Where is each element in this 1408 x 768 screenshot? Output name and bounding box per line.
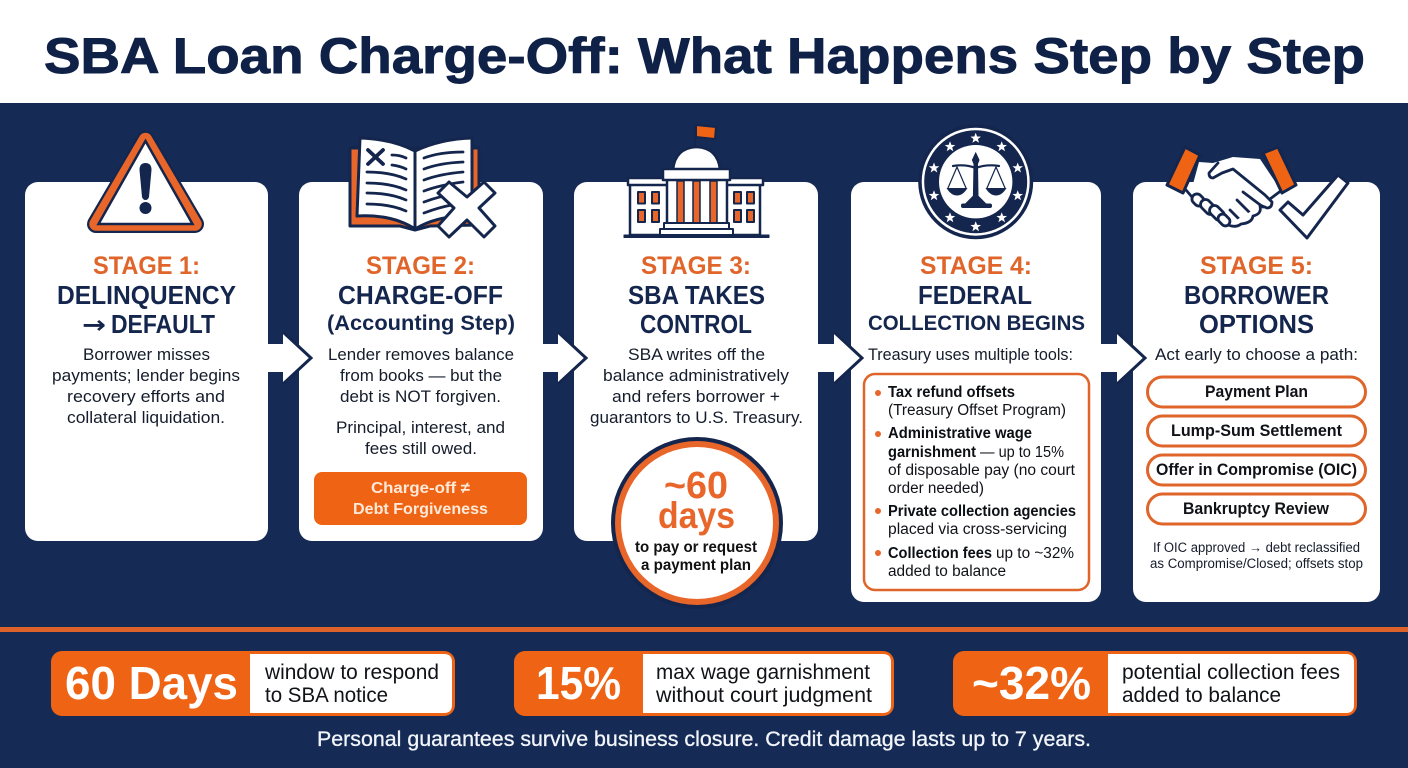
- option: offer in compromise: Offer in Compromise (OIC): [1156, 461, 1357, 479]
- text: stage 3 description: and refers borrower +: [612, 388, 780, 406]
- heading: delinquency to default: DELINQUENCY: [57, 280, 236, 310]
- icon: warning triangle: [96, 140, 195, 224]
- list item: tax refund offsets: (Treasury Offset Program): [888, 402, 1066, 419]
- note: OIC outcome: If OIC approved → debt reclassified: [1153, 540, 1360, 555]
- heading: charge-off: CHARGE-OFF: [338, 280, 503, 310]
- list item: wage garnishment: — up to 15%: [980, 444, 1064, 461]
- option: offer in compromise: [1148, 455, 1366, 485]
- icon: federal seal with scales: [918, 124, 1033, 239]
- text: stage 2 description: Principal, interest, and: [336, 419, 505, 437]
- text: stage 2 description: [328, 346, 514, 458]
- text: stage 1 description: Borrower misses: [83, 346, 210, 364]
- text: stage 3 description: guarantors to U.S. Treasury.: [590, 409, 803, 427]
- heading: delinquency to default: [57, 280, 236, 339]
- heading: delinquency to default: DEFAULT: [111, 309, 215, 339]
- heading: delinquency to default: →: [82, 311, 106, 339]
- text: stage 3 description: SBA writes off the: [628, 346, 765, 364]
- heading: federal collection begins: [868, 280, 1085, 335]
- stat: 32 percent: potential collection fees: [1122, 660, 1340, 684]
- callout: 60 days circle: a payment plan: [641, 557, 751, 574]
- option: bankruptcy review: Bankruptcy Review: [1183, 500, 1329, 518]
- list item: collection fees: Collection fees: [888, 545, 992, 562]
- option: payment plan: [1148, 377, 1366, 407]
- option: lump-sum settlement: Lump-Sum Settlement: [1171, 422, 1342, 440]
- icon: capitol building: [624, 125, 769, 238]
- stat: 32 percent: added to balance: [1122, 683, 1281, 707]
- heading: stage 1: STAGE 1:: [93, 252, 200, 280]
- list item: wage garnishment: Administrative wage: [888, 425, 1032, 442]
- callout: charge-off is not forgiveness: Debt Forgiveness: [353, 501, 488, 518]
- text: stage 3 description: balance administratively: [603, 367, 790, 385]
- callout: 60 days circle: ~60: [664, 465, 728, 507]
- list item: wage garnishment: of disposable pay (no court: [888, 462, 1076, 479]
- stat: 32 percent: ~32%: [972, 657, 1091, 709]
- callout: 60 days circle: [611, 437, 783, 609]
- arrow: stage 2 to 3: [543, 332, 586, 384]
- list item: private collection agencies: Private collection agencies: [888, 503, 1076, 520]
- option: bankruptcy review: [1148, 494, 1366, 524]
- stat: 60 days: window to respond: [264, 660, 439, 684]
- stat: 15 percent: [514, 651, 894, 716]
- text: stage 2 description: Lender removes balance: [328, 346, 514, 364]
- heading: SBA takes control: [628, 280, 765, 339]
- text: treasury intro: Treasury uses multiple tools:: [868, 346, 1073, 364]
- list item: wage garnishment: order needed): [888, 480, 984, 497]
- list item: tax refund offsets: [875, 384, 1066, 419]
- callout: 60 days circle: to pay or request: [635, 539, 758, 556]
- heading: stage 2: STAGE 2:: [366, 252, 475, 280]
- arrow: stage 4 to 5: [1101, 332, 1145, 384]
- callout: charge-off is not forgiveness: [314, 472, 527, 525]
- arrow: stage 3 to 4: [818, 332, 862, 384]
- panel: stage 4: [851, 124, 1101, 602]
- heading: SBA takes control: CONTROL: [640, 309, 752, 339]
- icon: handshake with check: [1167, 147, 1348, 238]
- panel: treasury tools list: [864, 374, 1089, 590]
- text: stage 2 description: from books — but the: [340, 367, 502, 385]
- panel: stage 2: [299, 138, 543, 541]
- stat: 32 percent: [953, 651, 1357, 716]
- panel: stage 5: [1133, 147, 1380, 602]
- heading: stage 5: STAGE 5:: [1200, 252, 1313, 280]
- text: stage 1 description: recovery efforts and: [67, 388, 225, 406]
- text: stage 1 description: collateral liquidation.: [67, 409, 225, 427]
- heading: SBA takes control: SBA TAKES: [628, 280, 765, 310]
- list item: collection fees: [875, 545, 1074, 580]
- text: stage 3 description: [590, 346, 803, 427]
- text: stage 1 description: payments; lender begins: [52, 367, 240, 385]
- icon: open book with X: [350, 138, 495, 237]
- callout: charge-off is not forgiveness: Charge-off ≠: [371, 480, 470, 497]
- list item: private collection agencies: placed via cross-servicing: [888, 521, 1067, 538]
- panel: stage 3: [574, 125, 818, 609]
- list item: wage garnishment: [875, 425, 1076, 497]
- heading: charge-off: [327, 280, 515, 335]
- text: options intro: Act early to choose a path:: [1155, 346, 1358, 364]
- arrow: stage 1 to 2: [268, 332, 311, 384]
- list item: private collection agencies: [875, 503, 1076, 538]
- option: payment plan: Payment Plan: [1205, 383, 1308, 401]
- title: SBA Loan Charge-Off: What Happens Step by Step: [44, 28, 1365, 84]
- option: lump-sum settlement: [1148, 416, 1366, 446]
- list item: collection fees: up to ~32%: [996, 545, 1074, 562]
- footer note: Personal guarantees survive business closure. Credit damage lasts up to 7 years.: [317, 728, 1091, 751]
- heading: stage 3: STAGE 3:: [641, 252, 751, 280]
- note: OIC outcome: as Compromise/Closed; offsets stop: [1150, 556, 1363, 571]
- list item: collection fees: added to balance: [888, 563, 1006, 580]
- panel: stage 1: [25, 140, 268, 541]
- stat: 60 days: to SBA notice: [265, 683, 388, 707]
- stat: 60 days: 60 Days: [65, 657, 238, 709]
- text: stage 2 description: debt is NOT forgiven.: [340, 388, 501, 406]
- heading: federal collection begins: FEDERAL: [918, 280, 1032, 310]
- heading: stage 4: STAGE 4:: [920, 252, 1032, 280]
- stat: 15 percent: 15%: [536, 657, 621, 709]
- stat: 60 days: [51, 651, 455, 716]
- heading: federal collection begins: COLLECTION BEGINS: [868, 312, 1085, 335]
- stat: 15 percent: max wage garnishment: [656, 660, 870, 684]
- heading: borrower options: OPTIONS: [1199, 309, 1314, 339]
- list item: wage garnishment: garnishment: [888, 444, 976, 461]
- note: OIC outcome: [1150, 540, 1363, 571]
- heading: borrower options: [1184, 280, 1329, 339]
- heading: charge-off: (Accounting Step): [327, 312, 515, 335]
- callout: 60 days circle: days: [658, 495, 735, 536]
- list item: tax refund offsets: Tax refund offsets: [888, 384, 1015, 401]
- text: stage 1 description: [52, 346, 240, 427]
- text: stage 2 description: fees still owed.: [365, 440, 477, 458]
- heading: borrower options: BORROWER: [1184, 280, 1329, 310]
- stat: 15 percent: without court judgment: [655, 683, 872, 707]
